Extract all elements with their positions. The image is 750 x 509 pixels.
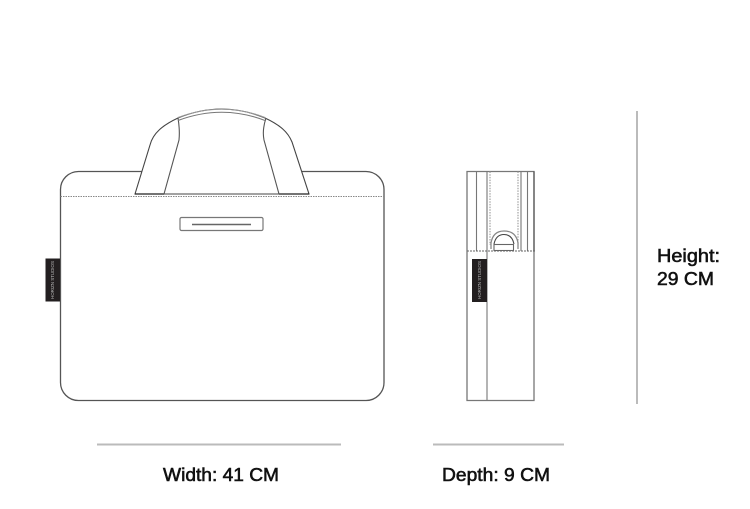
brand tag on side view: HORIZN STUDIOS xyxy=(477,261,482,299)
bag body outline xyxy=(60,172,384,400)
side outline xyxy=(467,172,534,400)
front view of bag xyxy=(60,109,384,400)
height label: Height: xyxy=(657,246,720,266)
side panel lines xyxy=(476,172,528,400)
zip pull plate xyxy=(180,218,263,230)
side view of bag xyxy=(467,172,536,400)
height measure line xyxy=(636,111,638,404)
seam stitching xyxy=(60,196,384,198)
brand tag on side view xyxy=(472,259,487,302)
width measure line xyxy=(97,444,341,446)
brand tag on front view: HORIZN STUDIOS xyxy=(50,261,55,299)
width label: Width: 41 CM xyxy=(163,465,279,485)
handle xyxy=(135,109,309,194)
depth label: Depth: 9 CM xyxy=(442,465,550,485)
depth measure line xyxy=(433,444,564,446)
brand tag on front view xyxy=(46,258,60,302)
side seam xyxy=(467,250,536,252)
height label xyxy=(657,246,720,289)
height label: 29 CM xyxy=(657,269,714,289)
D-ring xyxy=(491,231,518,250)
